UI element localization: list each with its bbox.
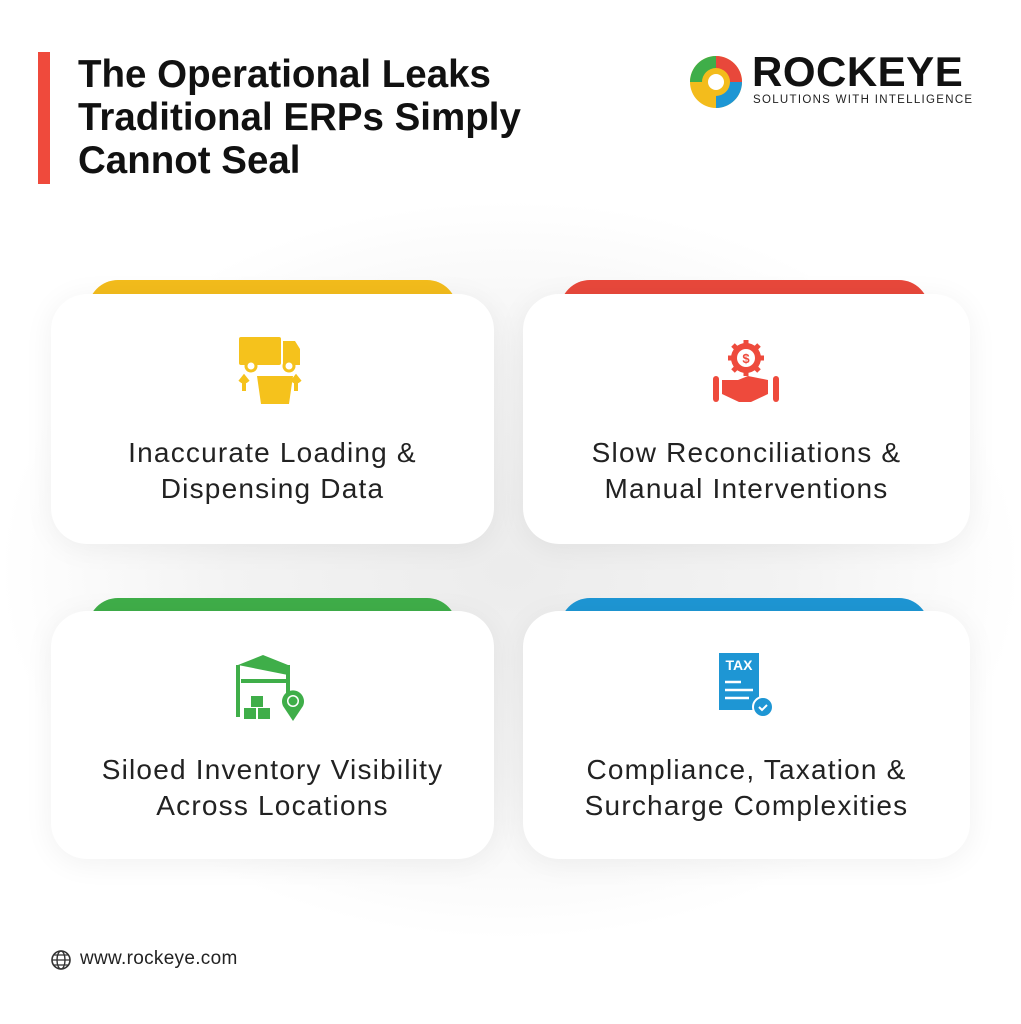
icon: globe	[51, 950, 71, 970]
text: Slow Reconciliations &	[592, 437, 901, 468]
logo: ROCKEYE	[752, 48, 963, 95]
text: Siloed Inventory Visibility	[102, 754, 443, 785]
footer website: www.rockeye.com	[80, 948, 238, 969]
text	[592, 437, 901, 504]
text: Surcharge Complexities	[585, 790, 908, 821]
title: Traditional ERPs Simply	[78, 96, 521, 139]
icon: gear handshake: $	[742, 351, 750, 366]
icon: truck box	[238, 337, 302, 404]
text	[128, 437, 417, 504]
title	[78, 53, 521, 182]
accent bar	[38, 52, 50, 184]
title: The Operational Leaks	[78, 53, 491, 96]
card: compliance	[523, 611, 970, 859]
card: reconciliations	[523, 294, 970, 544]
logo: SOLUTIONS WITH INTELLIGENCE	[753, 94, 973, 106]
logo	[690, 48, 973, 108]
text	[585, 754, 908, 821]
text: Dispensing Data	[161, 473, 384, 504]
text: Manual Interventions	[605, 473, 888, 504]
text: Across Locations	[156, 790, 389, 821]
title: Cannot Seal	[78, 139, 300, 182]
card: inventory	[51, 611, 494, 859]
text: Compliance, Taxation &	[586, 754, 907, 785]
icon: tax document	[719, 653, 772, 716]
text: Inaccurate Loading &	[128, 437, 417, 468]
text	[102, 754, 443, 821]
icon: warehouse pin	[236, 655, 304, 721]
icon: gear handshake	[713, 340, 779, 402]
icon: tax document: TAX	[726, 657, 753, 673]
card: loading	[51, 294, 494, 544]
tabs	[88, 280, 457, 340]
